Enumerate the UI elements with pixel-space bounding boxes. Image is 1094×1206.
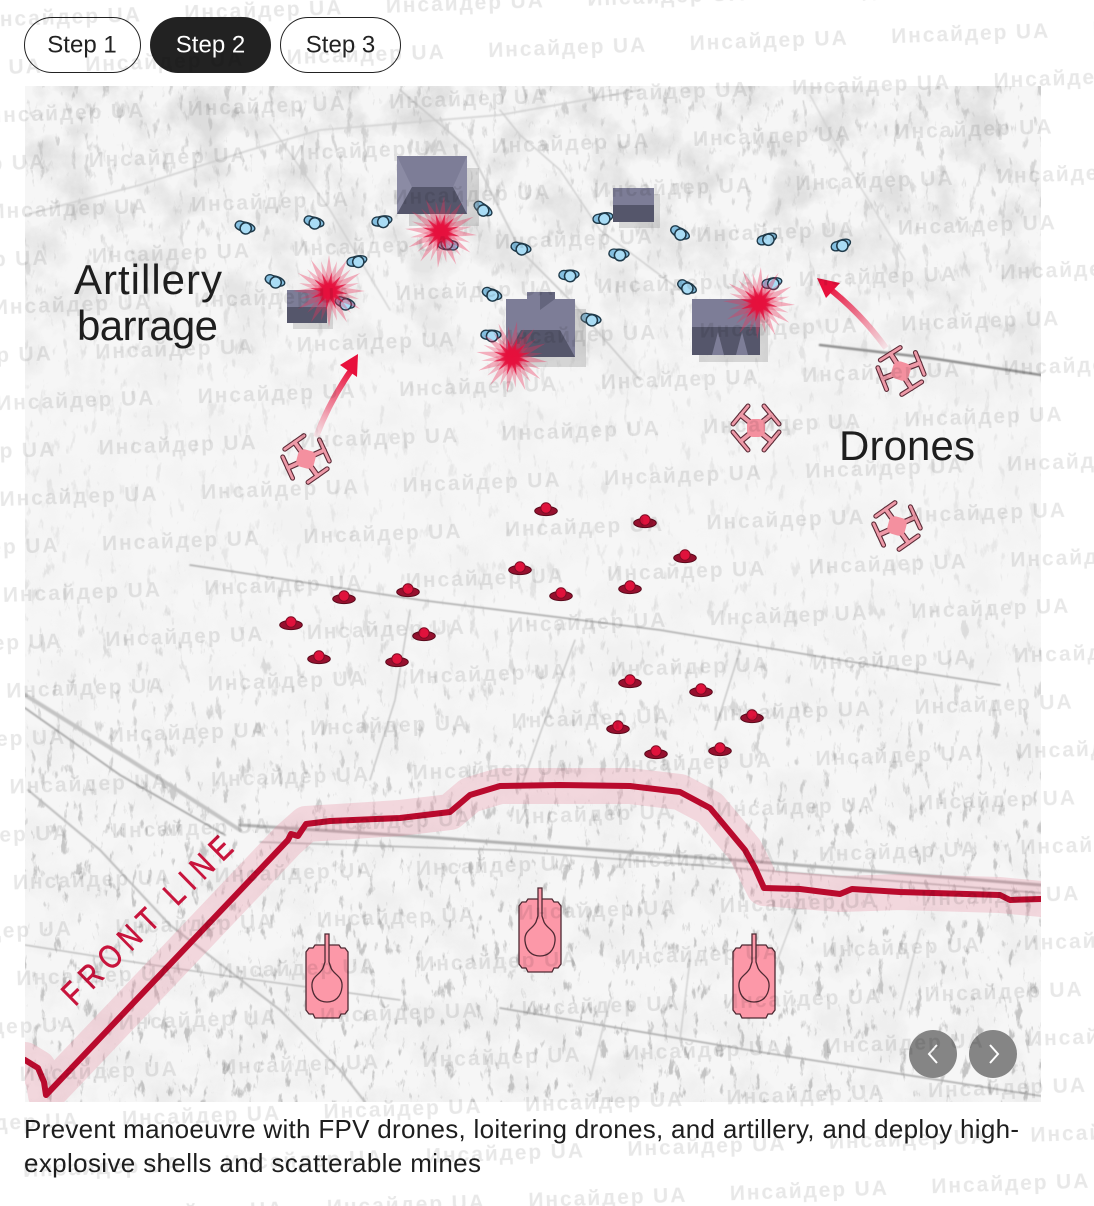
label: Artillery barrage: Artillery (74, 256, 222, 303)
next button (969, 1030, 1017, 1078)
tab: Step 3 (280, 18, 400, 72)
label: Artillery barrage (74, 256, 222, 349)
building: centre (506, 292, 586, 367)
map panel (25, 86, 1041, 1102)
front line label: FRONT LINE (55, 830, 240, 1013)
building: top centre (397, 156, 479, 226)
drones (278, 343, 930, 553)
previous button (909, 1030, 957, 1078)
arrow: drone to artillery barrage (316, 354, 358, 437)
label: Drones: Drones (839, 422, 975, 469)
step tabs (24, 17, 400, 73)
caption: Prevent manoeuvre with FPV drones, loitering drones, and artillery, and deploy high- (24, 1114, 1019, 1144)
tab: Step 2 active (150, 17, 271, 73)
mines (280, 503, 763, 759)
front line halo (25, 786, 1041, 1095)
building: top right small (613, 188, 660, 228)
infantry group (234, 199, 853, 342)
tab: Step 2 active: Step 2 (176, 32, 245, 58)
tab: Step 1 (24, 18, 140, 72)
caption: explosive shells and scatterable mines (24, 1148, 481, 1178)
tab: Step 1: Step 1 (47, 32, 117, 58)
explosions (291, 191, 799, 400)
label: Artillery barrage: barrage (77, 302, 218, 349)
arrow: drone to target (817, 278, 886, 348)
building: right (692, 299, 768, 362)
front line band (25, 785, 1041, 1095)
front line (25, 785, 1041, 1095)
building: left small (287, 290, 333, 329)
map base terrain (25, 86, 1041, 1102)
map roads (25, 90, 1041, 1102)
tanks (306, 888, 775, 1018)
caption (24, 1114, 1019, 1178)
tab: Step 3: Step 3 (306, 32, 375, 58)
